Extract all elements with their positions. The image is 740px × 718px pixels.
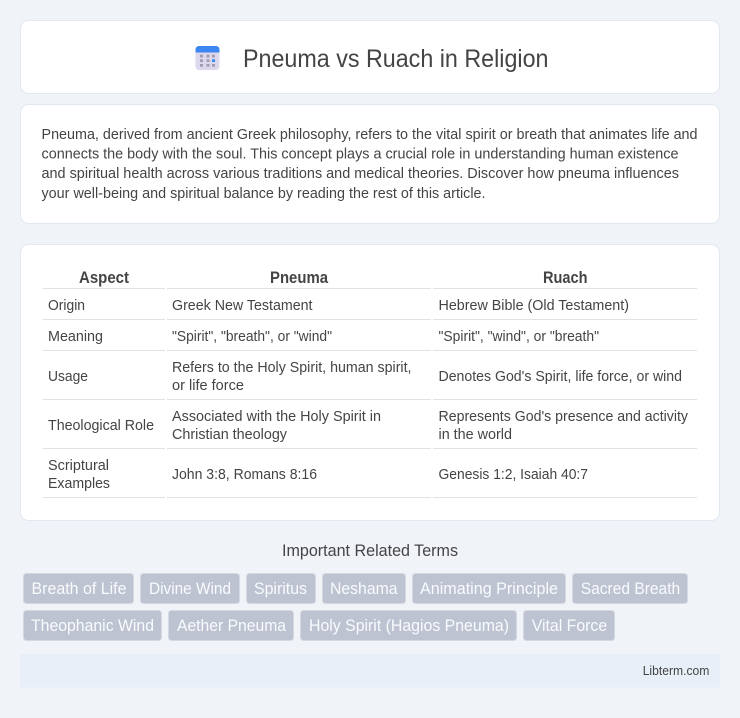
row: meaning: Meaning	[48, 329, 103, 345]
row: meaning	[48, 329, 599, 345]
tag: Holy Spirit (Hagios Pneuma)	[300, 610, 516, 640]
row: meaning: "Spirit", "breath", or "wind"	[172, 329, 332, 345]
table header row: Aspect	[79, 269, 129, 287]
tag: Vital Force	[524, 610, 614, 640]
tag: Divine Wind: Divine Wind	[149, 579, 231, 598]
row: meaning: "Spirit", "wind", or "breath"	[438, 329, 599, 345]
intro paragraph: and spiritual health across various traditions and medical theories. Discover how pneuma influences	[42, 165, 679, 182]
row: origin	[48, 298, 629, 314]
intro paragraph: connects the body with the soul. This concept plays a crucial role in understanding human existence	[42, 146, 678, 163]
intro paragraph	[42, 126, 698, 202]
footer bar	[20, 654, 720, 688]
row: theological role: Associated with the Holy Spirit in	[172, 409, 381, 425]
row: theological role: Theological Role	[48, 418, 154, 434]
related terms heading: Important Related Terms	[282, 542, 458, 560]
row: origin: Hebrew Bible (Old Testament)	[438, 298, 629, 314]
tag: Divine Wind	[140, 574, 240, 604]
tag: Sacred Breath	[572, 574, 688, 604]
table header row: Ruach	[543, 269, 588, 287]
title: Pneuma vs Ruach in Religion	[243, 45, 548, 73]
row: usage: Usage	[48, 369, 88, 385]
related terms tags	[24, 574, 688, 640]
tag: Aether Pneuma: Aether Pneuma	[177, 616, 287, 635]
row: theological role: in the world	[438, 427, 512, 443]
row: theological role	[48, 409, 689, 443]
intro paragraph: your well-being and spiritual balance by reading the rest of this article.	[42, 185, 486, 202]
tag: Holy Spirit (Hagios Pneuma): Holy Spirit (Hagios Pneuma)	[309, 616, 509, 635]
row: usage: Denotes God's Spirit, life force, or wind	[438, 369, 682, 385]
tag: Spiritus	[246, 574, 316, 604]
tag: Neshama: Neshama	[330, 579, 398, 598]
tag: Vital Force: Vital Force	[532, 616, 607, 635]
row: theological role: Represents God's presence and activity	[438, 409, 689, 425]
table header row	[79, 269, 588, 287]
tag: Animating Principle: Animating Principle	[420, 579, 558, 598]
panel: comparison table	[20, 244, 720, 520]
tag: Theophanic Wind	[24, 610, 162, 640]
row: scriptural examples: Genesis 1:2, Isaiah 40:7	[438, 467, 588, 483]
row: scriptural examples: Examples	[48, 476, 110, 492]
tag: Aether Pneuma	[168, 610, 294, 640]
row: scriptural examples: Scriptural	[48, 458, 109, 474]
tag: Spiritus: Spiritus	[254, 579, 307, 598]
tag: Breath of Life	[24, 574, 134, 604]
tag: Sacred Breath: Sacred Breath	[581, 579, 680, 598]
row: origin: Origin	[48, 298, 85, 314]
tag: Animating Principle	[412, 574, 566, 604]
tag: Breath of Life: Breath of Life	[32, 579, 126, 598]
row: usage: Refers to the Holy Spirit, human spirit,	[172, 360, 412, 376]
tag: Theophanic Wind: Theophanic Wind	[31, 616, 154, 635]
row: origin: Greek New Testament	[172, 298, 312, 314]
row: usage: or life force	[172, 378, 244, 394]
icon: calendar	[196, 46, 220, 70]
row: theological role: Christian theology	[172, 427, 288, 443]
tag: Neshama	[322, 574, 406, 604]
header panel	[20, 20, 720, 94]
row: scriptural examples	[48, 458, 588, 492]
intro paragraph: Pneuma, derived from ancient Greek philosophy, refers to the vital spirit or breath that animates life and	[42, 126, 698, 143]
row: usage	[48, 360, 682, 394]
row: scriptural examples: John 3:8, Romans 8:16	[172, 467, 317, 483]
footer credit: Libterm.com	[643, 664, 709, 678]
table header row: Pneuma	[270, 269, 329, 287]
panel: introduction	[20, 104, 720, 224]
